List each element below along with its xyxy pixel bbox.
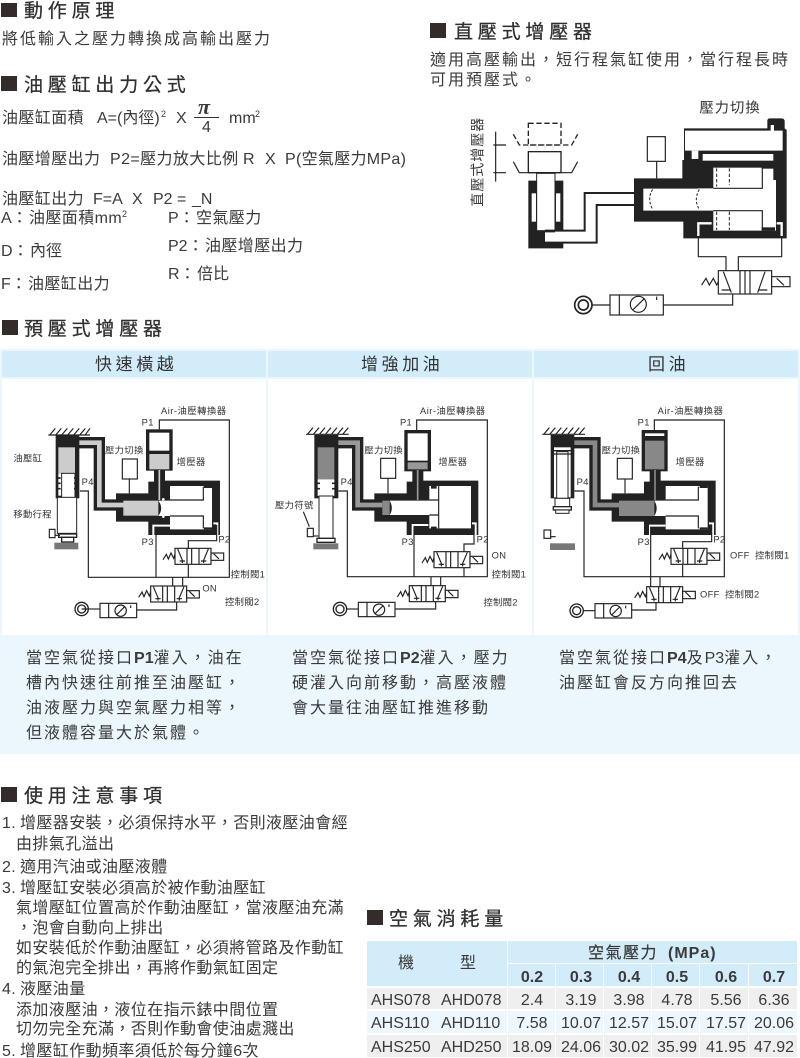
text: pressure intensification description: 硬灌入向前移動，高壓液體 — [292, 674, 508, 692]
table: air consumption: 型 — [460, 954, 476, 972]
legend: formula symbols: 空氣壓力 — [196, 209, 262, 227]
table: air consumption: 35.99 — [657, 1039, 697, 1056]
diagram: rapid traverse circuit: 增壓器 — [177, 456, 206, 467]
diagram: return stroke circuit: P3 — [638, 537, 650, 547]
text: usage notes list: 適用汽油或油壓液體 — [20, 858, 168, 876]
legend: formula symbols: 2 — [122, 209, 127, 219]
column header: 回油: 回油 — [648, 355, 689, 374]
diagram: pressure intensification circuit: Air-油壓轉換器 — [420, 405, 486, 416]
panel background: three-column process table — [0, 349, 800, 754]
formula: cylinder area: 2 — [255, 109, 260, 119]
diagram: rapid traverse circuit: P2 — [218, 535, 230, 545]
table: air consumption: AHD110 — [441, 1015, 500, 1032]
diagram: return stroke circuit: 控制閥1 — [755, 549, 790, 560]
diagram: return stroke circuit: OFF — [700, 589, 720, 599]
legend: formula symbols: A： — [1, 210, 28, 227]
formula: cylinder output force — [2, 189, 212, 208]
formula: cylinder output force: 油壓缸出力 — [2, 189, 84, 208]
table: air consumption: 空氣壓力 — [588, 944, 658, 962]
legend: formula symbols: 油壓增壓出力 — [205, 237, 303, 255]
text: usage notes list: 氣增壓缸位置高於作動油壓缸，當液壓油充滿 — [16, 898, 344, 917]
diagram: return stroke circuit: Air-油壓轉換器 — [658, 405, 723, 416]
legend: formula symbols: F： — [1, 276, 27, 293]
diagram: pressure intensification circuit: 增壓器 — [438, 456, 467, 467]
table: air consumption: 0.7 — [763, 969, 785, 986]
table: air consumption: 7.58 — [516, 1015, 548, 1032]
formula: cylinder area — [2, 94, 260, 136]
text: return stroke description: 油壓缸會反方向推回去 — [559, 673, 739, 692]
text: usage notes list: 3. — [2, 880, 16, 897]
table: air consumption: 5.56 — [710, 992, 742, 1009]
diagram: rapid traverse circuit: P1 — [142, 418, 154, 428]
formula: cylinder area: mm — [229, 110, 256, 127]
diagram: direct-pressure booster circuit: 壓力切換 — [699, 100, 761, 117]
diagram: rapid traverse circuit: Air-油壓轉換器 — [161, 405, 227, 416]
heading: 空氣消耗量: 空氣消耗量 — [389, 908, 508, 930]
formula: cylinder output force: = — [177, 191, 186, 208]
diagram: rapid traverse circuit: P3 — [142, 537, 154, 547]
text: rapid traverse description: 槽內快速往前推至油壓缸， — [26, 673, 242, 692]
heading: 使用注意事項: 使用注意事項 — [24, 785, 167, 807]
legend: formula symbols: D： — [1, 243, 29, 260]
formula: cylinder output force: X — [132, 191, 143, 208]
column header: 快速橫越: 快速橫越 — [95, 355, 177, 374]
diagram: rapid traverse circuit: 控制閥2 — [225, 596, 260, 607]
table: air consumption — [367, 941, 797, 1057]
formula: cylinder area: 油壓缸面積 — [2, 108, 84, 127]
text: direct-pressure description: 適用高壓輸出，短行程氣缸使用，當行程長時 — [430, 50, 790, 69]
text: direct-pressure description — [430, 50, 790, 89]
formula: cylinder area: 4 — [202, 119, 211, 136]
text: rapid traverse description: 但液體容量大於氣體。 — [26, 724, 206, 742]
formula: cylinder area: A=(內徑) — [97, 109, 160, 127]
heading: 直壓式增壓器: 直壓式增壓器 — [454, 21, 597, 43]
table: air consumption: (MPa) — [668, 945, 717, 962]
diagram: pressure intensification circuit: 壓力切換 — [364, 444, 403, 455]
table: air consumption: 17.57 — [706, 1015, 746, 1032]
diagram: rapid traverse circuit: 油壓缸 — [13, 453, 42, 464]
diagram: rapid traverse circuit: 控制閥1 — [231, 569, 265, 580]
text: usage notes list: 的氣泡完全排出，再將作動氣缸固定 — [16, 958, 278, 977]
formula: booster output pressure: P2=壓力放大比例 — [110, 150, 239, 168]
diagram: pressure intensification circuit: P3 — [402, 537, 414, 547]
text: pressure intensification description — [292, 649, 510, 717]
heading: 預壓式增壓器: 預壓式增壓器 — [24, 318, 167, 340]
table: air consumption: 15.07 — [657, 1015, 697, 1032]
diagram: pressure intensification circuit: 壓力符號 — [275, 499, 314, 510]
table: air consumption: 0.4 — [618, 969, 640, 986]
legend: formula symbols: R： — [168, 266, 196, 283]
text: usage notes list: 添加液壓油，液位在指示錶中間位置 — [16, 1001, 278, 1019]
diagram: return stroke circuit: OFF — [730, 550, 750, 560]
text: usage notes list: 液壓油量 — [20, 980, 86, 998]
text: usage notes list: 由排氣孔溢出 — [16, 835, 114, 853]
text: usage notes list: 增壓器安裝，必須保持水平，否則液壓油會經 — [20, 813, 348, 832]
diagram: rapid traverse circuit: P4 — [82, 477, 94, 487]
table: air consumption: 20.06 — [754, 1015, 794, 1032]
diagram: pressure intensification circuit: 控制閥2 — [483, 597, 518, 608]
legend: formula symbols: 油壓缸出力 — [28, 274, 110, 293]
diagram: direct-pressure booster circuit: 直壓式增壓器 — [469, 117, 485, 207]
diagram: return stroke circuit: P4 — [577, 477, 589, 487]
table: air consumption: 30.02 — [609, 1039, 649, 1056]
text: usage notes list: 如安裝低於作動油壓缸，必須將管路及作動缸 — [16, 938, 344, 957]
diagram: direct-pressure booster circuit — [469, 100, 790, 315]
formula: cylinder area: 2 — [161, 109, 166, 119]
legend: formula symbols: 倍比 — [197, 265, 229, 283]
formula: booster output pressure — [2, 150, 406, 168]
diagram: return stroke circuit: 增壓器 — [676, 456, 705, 467]
column header: 增強加油: 增強加油 — [361, 355, 443, 374]
table: air consumption: 10.07 — [561, 1015, 601, 1032]
formula: cylinder output force: P2 — [153, 191, 173, 208]
diagram: rapid traverse circuit: 壓力切換 — [105, 444, 144, 455]
text: pressure intensification description: 當空氣從接口P2灌入，壓力 — [292, 649, 510, 667]
table: air consumption: 24.06 — [561, 1039, 601, 1056]
table: air consumption: 0.6 — [715, 969, 737, 986]
table: air consumption: 機 — [398, 954, 414, 972]
legend: formula symbols: P2： — [168, 238, 204, 255]
legend: formula symbols — [1, 209, 303, 293]
table: air consumption: AHS110 — [371, 1015, 430, 1032]
diagram: pressure intensification circuit — [275, 405, 526, 617]
diagram: pressure intensification circuit: ON — [492, 550, 506, 560]
table: air consumption: 4.78 — [661, 992, 693, 1009]
table: air consumption: 0.2 — [521, 969, 543, 986]
text: usage notes list: 2. — [2, 859, 16, 876]
text: pressure intensification description: 會大量往油壓缸推進移動 — [292, 698, 490, 717]
diagram: return stroke circuit — [542, 405, 790, 618]
table: air consumption: 18.09 — [512, 1039, 552, 1056]
table: air consumption: AHD250 — [441, 1039, 502, 1056]
diagram: pressure intensification circuit: P4 — [341, 477, 353, 487]
table: air consumption: 3.19 — [565, 992, 597, 1009]
table: air consumption: 47.92 — [754, 1039, 794, 1056]
diagram: rapid traverse circuit — [13, 405, 265, 618]
table: air consumption: 12.57 — [609, 1015, 649, 1032]
text: rapid traverse description: 當空氣從接口P1灌入，油在 — [26, 649, 244, 667]
text: usage notes list: 4. — [2, 981, 16, 998]
formula: cylinder output force: _N — [191, 191, 212, 208]
table: air consumption: 3.98 — [613, 992, 645, 1009]
text: working principle description: 將低輸入之壓力轉換成高輸出壓力 — [2, 30, 272, 48]
diagram: return stroke circuit: 控制閥2 — [725, 588, 760, 599]
text: rapid traverse description: 油液壓力與空氣壓力相等， — [26, 698, 242, 717]
table: air consumption: AHD078 — [441, 992, 502, 1009]
text: usage notes list — [2, 813, 348, 1058]
diagram: return stroke circuit: P2 — [713, 535, 725, 545]
heading: 動作原理: 動作原理 — [24, 0, 119, 22]
table: air consumption: AHS078 — [371, 992, 431, 1009]
legend: formula symbols: 油壓面積mm — [29, 209, 122, 227]
diagram: return stroke circuit: P1 — [638, 418, 650, 428]
diagram: rapid traverse circuit: 移動行程 — [13, 508, 52, 519]
text: return stroke description — [559, 649, 778, 692]
formula: cylinder area: X — [176, 110, 187, 127]
text: usage notes list: ，泡會自動向上排出 — [16, 919, 164, 937]
text: usage notes list: 增壓缸安裝必須高於被作動油壓缸 — [20, 878, 266, 897]
formula: booster output pressure: R — [243, 151, 255, 168]
text: usage notes list: 切勿完全充滿，否則作動會使油處濺出 — [16, 1020, 295, 1038]
text: return stroke description: 當空氣從接口P4及P3灌入， — [559, 649, 778, 667]
table: air consumption: 0.3 — [570, 969, 592, 986]
legend: formula symbols: 內徑 — [30, 242, 62, 260]
table: air consumption: 0.5 — [666, 969, 688, 986]
diagram: pressure intensification circuit: P2 — [477, 535, 489, 545]
heading: 油壓缸出力公式: 油壓缸出力公式 — [24, 74, 191, 96]
formula: booster output pressure: P(空氣壓力MPa) — [285, 150, 406, 168]
diagram: return stroke circuit: 壓力切換 — [602, 444, 640, 455]
table: air consumption: 6.36 — [758, 992, 790, 1009]
table: air consumption: 41.95 — [706, 1039, 746, 1056]
text: usage notes list: 1. — [2, 815, 16, 832]
table: air consumption: 2.4 — [521, 992, 543, 1009]
diagram: pressure intensification circuit: 控制閥1 — [492, 569, 526, 580]
diagram: pressure intensification circuit: P1 — [400, 418, 412, 428]
text: direct-pressure description: 可用預壓式。 — [430, 71, 538, 89]
formula: cylinder output force: F=A — [93, 191, 123, 208]
legend: formula symbols: P： — [168, 210, 195, 227]
diagram: rapid traverse circuit: ON — [202, 584, 217, 594]
formula: booster output pressure: X — [265, 151, 276, 168]
text: rapid traverse description — [26, 649, 244, 742]
formula: booster output pressure: 油壓增壓出力 — [2, 150, 100, 168]
table: air consumption: AHS250 — [371, 1039, 431, 1056]
formula: cylinder area: π — [198, 94, 211, 119]
